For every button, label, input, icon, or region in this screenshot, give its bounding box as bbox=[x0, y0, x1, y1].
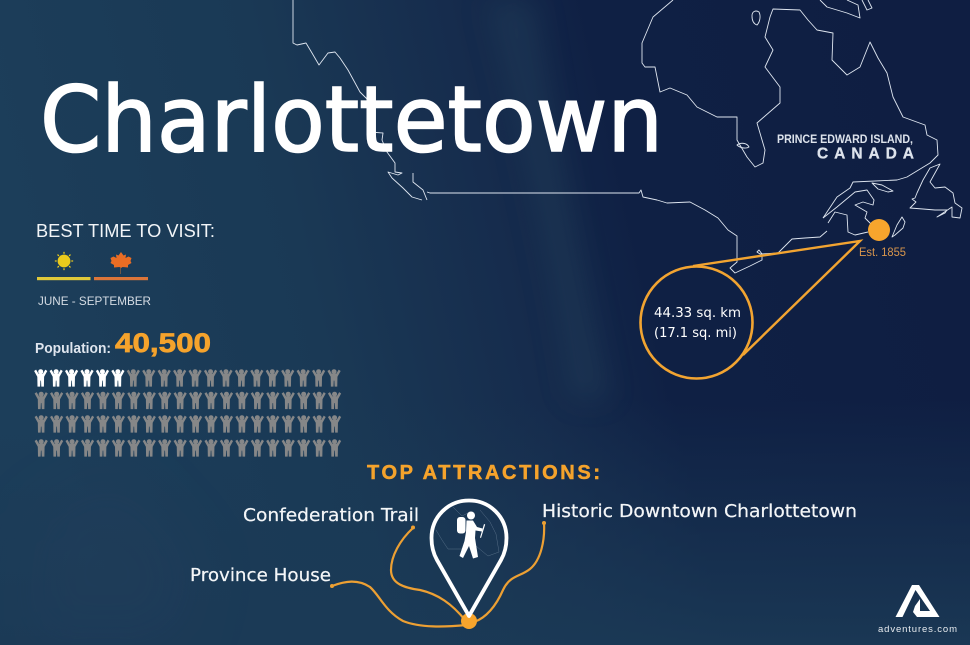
attraction labels: Historic Downtown Charlottetown bbox=[542, 501, 857, 522]
population value: 40,500 bbox=[115, 328, 211, 358]
icon: sun bbox=[55, 252, 73, 270]
logo bbox=[878, 585, 957, 635]
area callout: (17.1 sq. mi) bbox=[654, 325, 737, 341]
attraction labels: Province House bbox=[190, 565, 331, 586]
map of Canada outline bbox=[293, 0, 962, 273]
established label: Est. 1855 bbox=[859, 247, 906, 259]
area callout: 44.33 sq. km bbox=[654, 305, 741, 321]
icon: hiker bbox=[457, 512, 485, 558]
area callout bbox=[640, 241, 860, 378]
best time heading: BEST TIME TO VISIT: bbox=[36, 220, 215, 241]
attractions heading: TOP ATTRACTIONS: bbox=[367, 462, 600, 484]
map pin with hiker bbox=[432, 500, 506, 629]
attraction labels bbox=[190, 501, 857, 586]
season bars bbox=[37, 277, 148, 280]
logo: adventures.com bbox=[878, 624, 957, 635]
icon: maple leaf bbox=[110, 252, 132, 274]
location label bbox=[777, 134, 914, 162]
population label: Population: bbox=[35, 341, 111, 357]
months label: JUNE - SEPTEMBER bbox=[38, 294, 151, 308]
title: Charlottetown bbox=[40, 68, 663, 173]
population pictogram bbox=[34, 369, 341, 457]
location label: CANADA bbox=[817, 146, 914, 162]
connector lines bbox=[330, 521, 546, 626]
location dot bbox=[868, 219, 890, 241]
attraction labels: Confederation Trail bbox=[243, 505, 419, 526]
location label: PRINCE EDWARD ISLAND, bbox=[777, 134, 913, 146]
